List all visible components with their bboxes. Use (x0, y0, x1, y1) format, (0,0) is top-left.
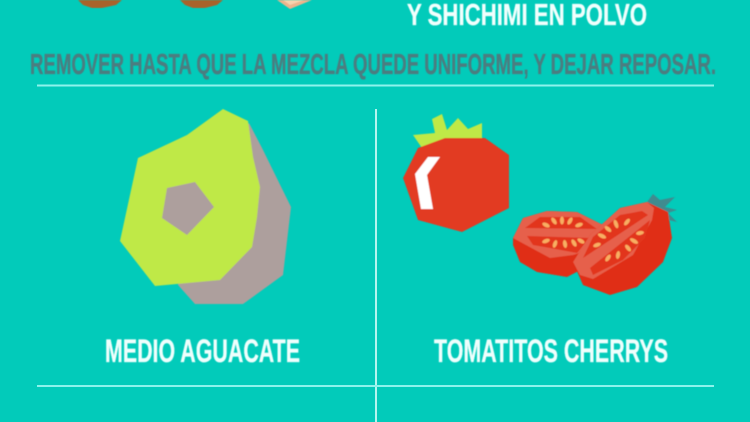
icon: avocado (120, 109, 291, 304)
text: avocado label: MEDIO AGUACATE (105, 333, 300, 369)
icon: peach ingredient (277, 0, 312, 9)
icon: brown ingredient 1 (78, 0, 122, 8)
icon: halved cherry tomato, left (513, 211, 603, 277)
icon: whole cherry tomato (403, 114, 509, 232)
icon: halved cherry tomato, right (573, 194, 677, 295)
icon: brown ingredient 2 (180, 0, 223, 8)
